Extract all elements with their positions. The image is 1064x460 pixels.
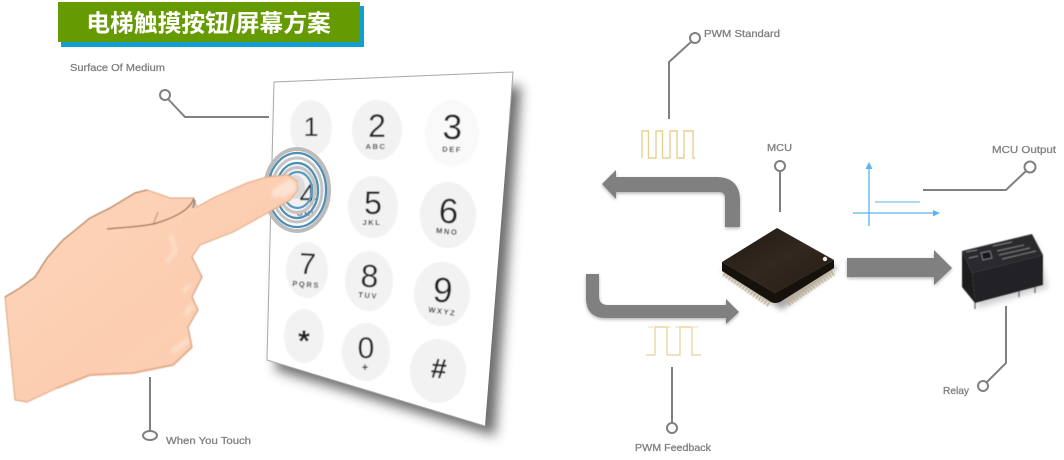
keypad buttons: DEF — [442, 145, 462, 154]
label: pwm standard — [669, 28, 780, 119]
mcu output chart — [853, 162, 940, 226]
keypad buttons: GHI — [297, 209, 315, 218]
touch ripple rings — [265, 149, 329, 231]
label: pwm feedback — [635, 367, 712, 454]
keypad buttons: JKL — [363, 218, 381, 227]
keypad buttons: TUV — [358, 290, 378, 301]
fingernail — [272, 179, 296, 197]
label: relay: Relay — [943, 385, 970, 397]
keypad buttons: 8 — [360, 258, 379, 294]
arrow: panel feedback to mcu — [586, 274, 739, 326]
label: when you touch — [143, 377, 251, 447]
title banner: 电梯触摸按钮/屏幕方案 — [86, 10, 331, 38]
label: surface of medium: Surface Of Medium — [70, 62, 165, 74]
relay markings — [966, 242, 1036, 260]
keypad buttons: # — [430, 352, 448, 385]
keypad buttons: 2 — [368, 108, 386, 144]
keypad buttons: * — [298, 325, 310, 358]
panel: touch keypad — [267, 72, 521, 436]
arrow: pwm output to panel — [602, 170, 740, 228]
pwm standard waveform — [642, 131, 695, 158]
arrow: mcu to relay — [847, 250, 952, 286]
keypad buttons: WXYZ — [428, 305, 457, 318]
keypad buttons: 7 — [298, 248, 317, 281]
icon: relay — [962, 234, 1048, 309]
keypad buttons: 9 — [432, 270, 454, 311]
label: mcu — [767, 142, 792, 212]
label: surface of medium — [70, 62, 269, 117]
icon: mcu chip — [722, 228, 838, 310]
keypad buttons: 4 — [299, 177, 317, 212]
keypad buttons: ABC — [365, 142, 387, 151]
keypad buttons: MNO — [436, 226, 459, 237]
keypad buttons: 6 — [438, 192, 459, 231]
keypad buttons: 1 — [303, 112, 319, 142]
thumb — [107, 198, 194, 229]
label: mcu: MCU — [767, 142, 792, 154]
keypad buttons: 3 — [442, 108, 463, 147]
label: when you touch: When You Touch — [166, 435, 251, 447]
keypad buttons: 5 — [364, 185, 382, 221]
keypad buttons: 0 — [358, 332, 374, 365]
keypad buttons — [278, 100, 479, 403]
keypad buttons: PQRS — [292, 279, 320, 290]
label: relay — [943, 306, 1006, 397]
label: mcu output: MCU Output — [992, 144, 1056, 156]
icon: pointing hand — [5, 175, 298, 402]
title banner — [58, 2, 364, 47]
pwm feedback waveform — [646, 327, 701, 355]
keypad buttons: + — [362, 362, 368, 374]
label: pwm feedback: PWM Feedback — [635, 442, 712, 454]
chip pins — [725, 271, 833, 303]
label: pwm standard: PWM Standard — [704, 28, 780, 40]
label: mcu output — [923, 144, 1056, 190]
